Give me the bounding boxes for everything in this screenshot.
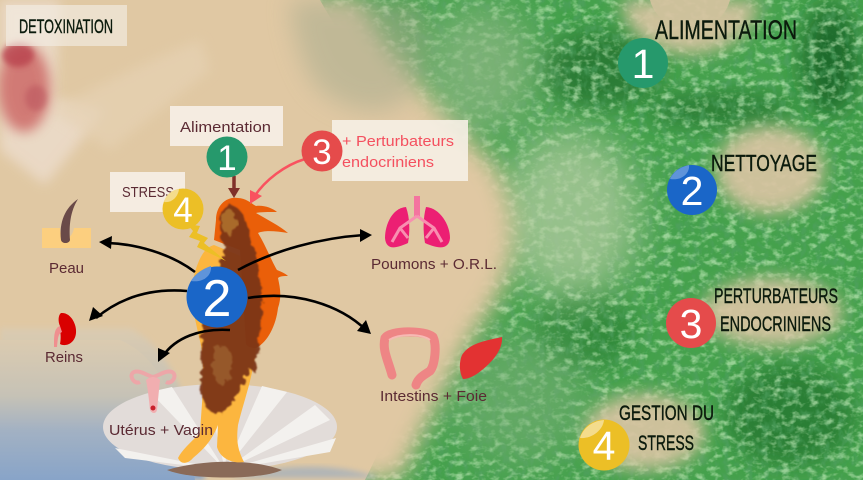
label box: Alimentation: Alimentation bbox=[180, 119, 271, 136]
label: Poumons + O.R.L.: Poumons + O.R.L. bbox=[371, 256, 497, 273]
right badge: 3 bbox=[666, 298, 716, 348]
label box: Perturbateurs endocriniens: endocriniens bbox=[342, 154, 434, 171]
right badge: 2: 2 bbox=[681, 168, 703, 214]
arrow: disruptors to body bbox=[250, 159, 305, 204]
background: skin-coloured photo area bbox=[0, 0, 514, 480]
right badge: 3: 3 bbox=[680, 301, 702, 347]
label box: Stress bbox=[110, 172, 185, 212]
arrow: food to body bbox=[228, 176, 240, 198]
icon: lungs bbox=[385, 196, 450, 247]
icon: uterus bbox=[132, 372, 174, 413]
right badge: 4: 4 bbox=[593, 423, 615, 469]
body bbox=[178, 245, 256, 463]
arrows: from detox to organs bbox=[96, 235, 366, 356]
hair bbox=[214, 198, 288, 348]
badge: 2 on figure bbox=[186, 266, 248, 328]
badge: 1 on figure: 1 bbox=[217, 139, 237, 178]
icon: seashell bbox=[103, 384, 337, 478]
badge: 3 on figure: 3 bbox=[312, 133, 332, 172]
icon: large intestine bbox=[384, 332, 435, 385]
label box: Stress: STRESS bbox=[122, 184, 174, 201]
right badge: 2 bbox=[667, 165, 717, 215]
badge: 3 on figure bbox=[302, 130, 342, 172]
label: Reins: Reins bbox=[45, 349, 83, 366]
background: bare tan patches on the grass bbox=[585, 0, 842, 470]
right heading: Gestion du stress: GESTION DU bbox=[619, 402, 714, 425]
label: Peau: Peau bbox=[49, 260, 84, 277]
label: Utérus + Vagin: Utérus + Vagin bbox=[109, 422, 213, 439]
label box: Perturbateurs endocriniens bbox=[332, 120, 468, 181]
label box: Alimentation bbox=[170, 106, 283, 146]
label: Détoxination bbox=[6, 5, 127, 46]
arrowheads bbox=[89, 229, 372, 362]
right heading: Alimentation: ALIMENTATION bbox=[655, 15, 797, 45]
right badge: 1: 1 bbox=[632, 41, 654, 87]
badge: 2 on figure: 2 bbox=[203, 270, 231, 328]
badge: 1 on figure bbox=[206, 136, 248, 178]
icon: kidney bbox=[54, 313, 76, 347]
label box: Perturbateurs endocriniens: + Perturbateurs bbox=[342, 133, 454, 150]
right badge: 4 bbox=[578, 420, 630, 470]
label: Détoxination: DETOXINATION bbox=[19, 17, 113, 38]
body hair texture bbox=[200, 205, 262, 413]
right heading: Gestion du stress: STRESS bbox=[638, 432, 694, 455]
icon: skin and hair follicle bbox=[42, 199, 91, 248]
badge: 4 on figure bbox=[162, 188, 204, 230]
label: Intestins + Foie: Intestins + Foie bbox=[380, 388, 487, 405]
right heading: Nettoyage: NETTOYAGE bbox=[711, 150, 817, 176]
right badge: 1 bbox=[618, 38, 668, 88]
right heading: Perturbateurs endocriniens bbox=[714, 285, 838, 336]
lightning bolt from stress bbox=[187, 224, 226, 261]
right heading: Gestion du stress bbox=[619, 402, 714, 455]
badge: 4 on figure: 4 bbox=[173, 191, 193, 230]
icon: liver bbox=[460, 337, 502, 379]
illustration: Venus figure bbox=[178, 198, 288, 463]
